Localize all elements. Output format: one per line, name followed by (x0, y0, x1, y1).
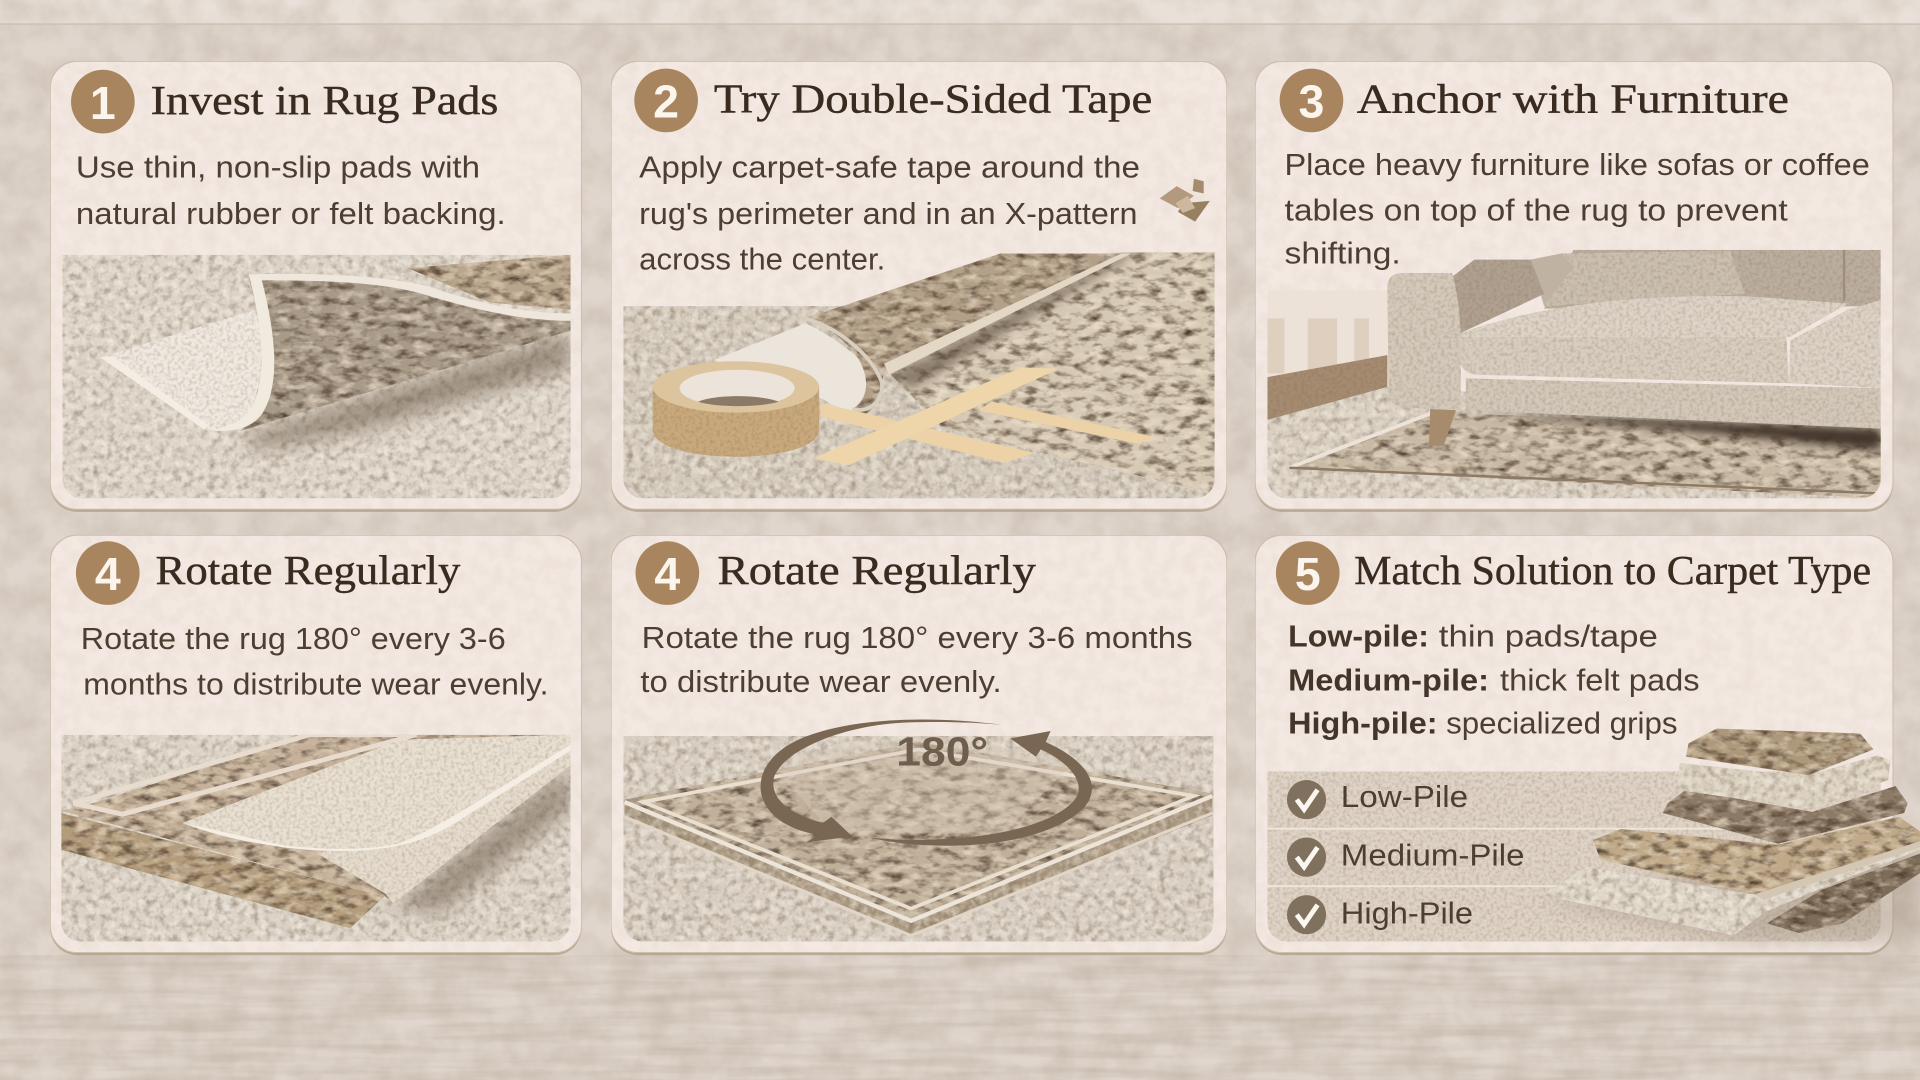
number badge 4: 4 (95, 548, 121, 600)
check item: Low-Pile: Low-Pile (1341, 780, 1468, 814)
check item: Medium-Pile: Medium-Pile (1341, 839, 1524, 873)
heading: Invest in Rug Pads: Invest in Rug Pads (151, 78, 498, 124)
panel: rotate regularly (pad on rug) (50, 535, 582, 955)
body text: pile recommendations: Medium-pile: (1288, 664, 1489, 698)
number badge 1: 1 (90, 77, 116, 129)
body text: rotate (640, 621, 1193, 699)
body text: pile recommendations: thin pads/tape (1439, 620, 1658, 654)
number badge 5 (1276, 541, 1340, 605)
body text: furniture: shifting. (1284, 236, 1401, 270)
body text: rug pads: Use thin, non-slip pads with (76, 151, 480, 185)
body text: tape (639, 151, 1140, 276)
number badge 4 (636, 541, 699, 605)
body text: pile recommendations (1288, 620, 1700, 740)
check item: High-Pile (1287, 895, 1473, 934)
body text: pile recommendations: High-pile: (1288, 706, 1438, 740)
body text: rotate: Rotate the rug 180° every 3-6 (81, 622, 506, 656)
number badge 3 (1280, 69, 1343, 132)
icon: tape pieces (1160, 179, 1210, 222)
body text: rug pads: natural rubber or felt backing. (76, 197, 506, 231)
arrow: counterclockwise upper-left arc (761, 719, 1002, 842)
number badge 3: 3 (1298, 76, 1324, 128)
number badge 5: 5 (1295, 548, 1321, 600)
panel: anchor with furniture (1255, 61, 1893, 512)
label: 180 degrees: 180° (896, 728, 988, 774)
number badge 2: 2 (653, 76, 679, 128)
body text: rotate: to distribute wear evenly. (640, 665, 1002, 699)
heading: Anchor with Furniture: Anchor with Furniture (1357, 77, 1789, 123)
body text: pile recommendations: specialized grips (1446, 706, 1678, 740)
body text: rotate: months to distribute wear evenly. (83, 667, 549, 701)
panel: match solution to carpet type (1255, 535, 1920, 955)
panel: try double-sided tape (611, 61, 1227, 512)
photo: tape roll and X-pattern on rug (623, 252, 1215, 500)
check item: High-Pile: High-Pile (1341, 896, 1473, 930)
photo: sofa anchoring a rug (1267, 250, 1881, 500)
photo: pad partly covering rug (61, 735, 571, 942)
body text: pile recommendations: thick felt pads (1500, 664, 1700, 698)
number badge 4 (76, 541, 140, 605)
body text: furniture (1284, 148, 1870, 270)
photo: rug with rotation arrows (623, 735, 1213, 942)
body text: rotate: Rotate the rug 180° every 3-6 months (642, 621, 1193, 655)
check item: Low-Pile (1287, 780, 1468, 819)
body text: rug pads (76, 151, 506, 231)
body text: rotate (81, 622, 549, 701)
heading: Rotate Regularly: Rotate Regularly (156, 548, 461, 594)
arrow: right lower arc (869, 731, 1092, 846)
heading: Try Double-Sided Tape: Try Double-Sided Tape (714, 77, 1152, 123)
panel: invest in rug pads (50, 61, 582, 512)
panel: rotate regularly (180 degree diagram) (611, 535, 1227, 955)
number badge 2 (634, 69, 698, 132)
body text: tape: Apply carpet-safe tape around the (639, 151, 1140, 185)
body text: furniture: Place heavy furniture like sofas or coffee (1284, 148, 1870, 182)
number badge 1 (71, 70, 135, 133)
body text: tape: across the center. (639, 242, 885, 276)
body text: tape: rug's perimeter and in an X-pattern (639, 197, 1138, 231)
photo: rug corner folded over showing pad backing (62, 255, 571, 498)
heading: Rotate Regularly: Rotate Regularly (718, 548, 1036, 594)
heading: Match Solution to Carpet Type: Match Solution to Carpet Type (1354, 548, 1871, 594)
photo: stacked carpet samples (1542, 729, 1920, 943)
checklist band (1267, 771, 1881, 942)
check item: Medium-Pile (1287, 838, 1524, 877)
body text: furniture: tables on top of the rug to prevent (1284, 193, 1788, 227)
number badge 4: 4 (654, 548, 680, 600)
body text: pile recommendations: Low-pile: (1288, 620, 1429, 654)
